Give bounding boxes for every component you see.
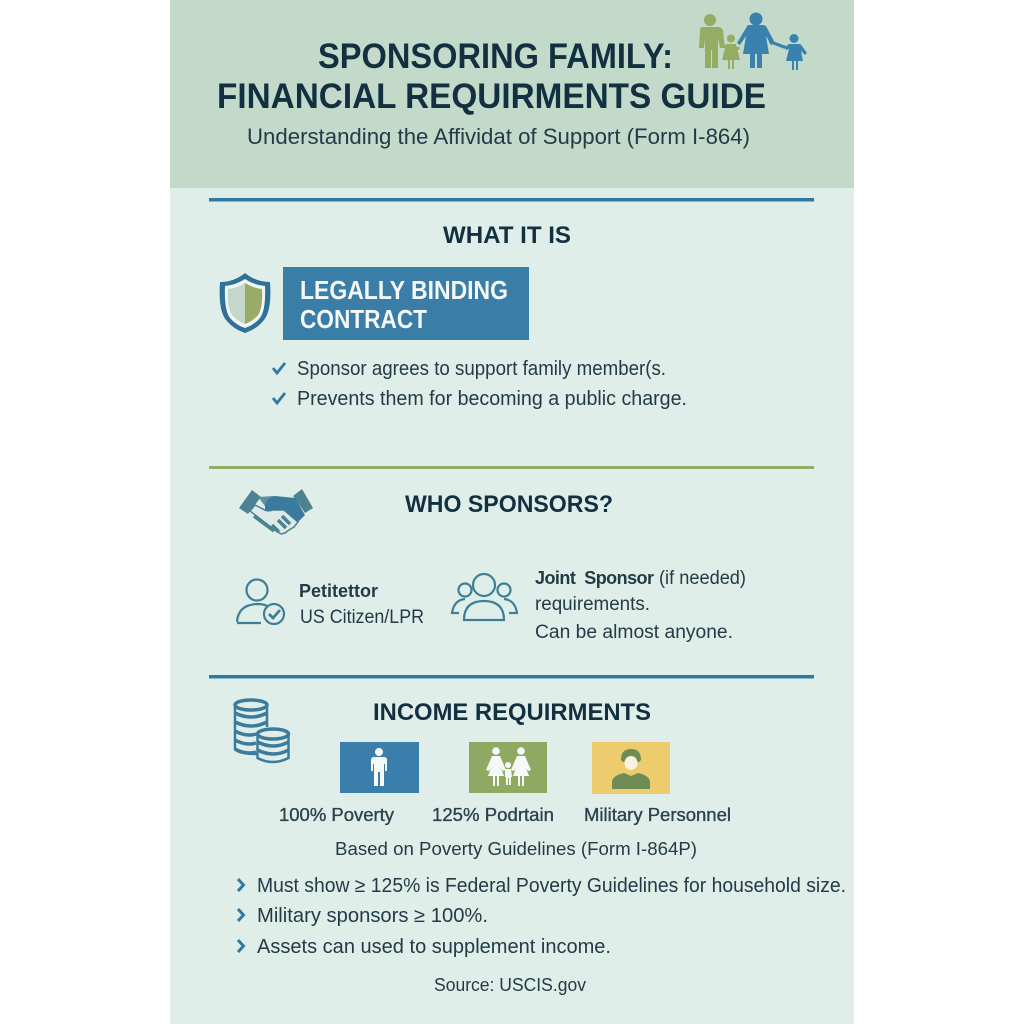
subtitle: Understanding the Affividat of Support (Form I-864) (247, 124, 750, 149)
icon: petitioner (237, 580, 284, 624)
tile: single person (340, 742, 419, 793)
text: joint sponsor: Joint Sponsor (535, 568, 654, 588)
label: military personnel: Military Personnel (584, 805, 731, 825)
callout: legally binding contract (283, 267, 529, 340)
callout: legally binding contract: LEGALLY BINDING (300, 275, 508, 305)
icon: joint sponsor group (452, 574, 517, 620)
title line 2: FINANCIAL REQUIRMENTS GUIDE (217, 77, 766, 116)
heading: what it is: WHAT IT IS (443, 222, 571, 249)
bullet: military sponsors: Military sponsors ≥ 100%. (257, 905, 488, 927)
text: joint sponsor: Can be almost anyone. (535, 622, 733, 643)
section: who sponsors (209, 466, 814, 643)
tile: family (469, 742, 547, 793)
text: based on poverty guidelines: Based on Poverty Guidelines (Form I-864P) (335, 839, 697, 859)
bullet: must show: Must show ≥ 125% is Federal Poverty Guidelines for household size. (257, 875, 846, 897)
icon: handshake (239, 489, 313, 534)
heading: income requirements: INCOME REQUIRMENTS (373, 699, 651, 726)
bullet: prevents public charge: Prevents them for becoming a public charge. (297, 388, 687, 410)
label: 125% podrtain: 125% Podrtain (432, 805, 554, 825)
icon: coins (235, 700, 288, 762)
text: petitioner: US Citizen/LPR (300, 607, 424, 628)
section: income requirements (209, 675, 846, 958)
text: joint sponsor (535, 568, 746, 643)
bullet: sponsor agrees: Sponsor agrees to support family member(s. (297, 358, 666, 380)
section: what it is (209, 198, 814, 410)
icon: shield (220, 273, 270, 333)
bullet: assets: Assets can used to supplement income. (257, 936, 611, 958)
icon: family (699, 12, 807, 70)
panel: page background (170, 0, 854, 1024)
text: petitioner: Petitettor (299, 581, 378, 601)
label: 100% poverty: 100% Poverty (279, 805, 394, 825)
panel: header (170, 0, 854, 188)
source: Source: USCIS.gov (434, 975, 586, 995)
title line 1: SPONSORING FAMILY: (318, 37, 673, 76)
callout: legally binding contract: CONTRACT (300, 304, 427, 334)
text: joint sponsor: (if needed) (659, 568, 746, 589)
text: petitioner (299, 581, 424, 628)
tile: military (592, 742, 670, 794)
heading: who sponsors: WHO SPONSORS? (405, 491, 613, 518)
text: joint sponsor: requirements. (535, 594, 650, 615)
